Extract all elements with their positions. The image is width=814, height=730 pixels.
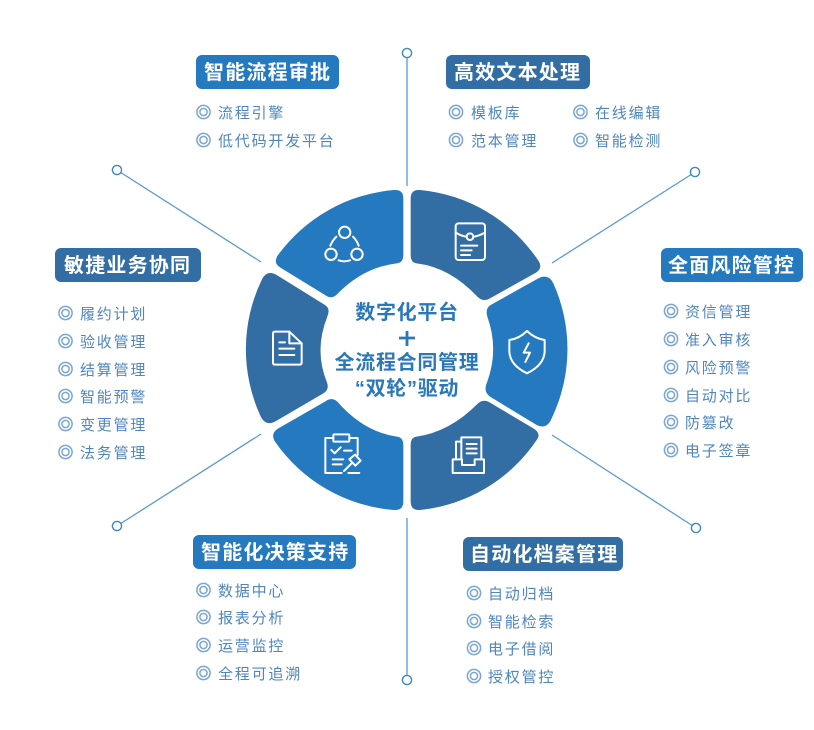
panel: 高效文本处理 [446, 55, 662, 150]
segment: top left with collaboration icon [276, 190, 403, 297]
panel: 全面风险管控: 全面风险管控 [668, 253, 795, 277]
segment: bottom right with archive tray icon [411, 401, 539, 510]
panel: 敏捷业务协同: 变更管理 [80, 417, 147, 434]
panel: 高效文本处理: 智能检测 [595, 132, 662, 150]
panel: 智能化决策支持: 运营监控 [218, 638, 285, 655]
panel: 智能流程审批 [196, 55, 339, 150]
panel: 敏捷业务协同: 法务管理 [80, 445, 147, 462]
panel: 自动化档案管理: 电子借阅 [488, 641, 555, 658]
panel: 全面风险管控: 自动对比 [685, 388, 752, 405]
connector: upper left [112, 165, 261, 262]
panel: 全面风险管控 [661, 248, 803, 460]
connector: lower right [552, 435, 701, 533]
panel: 全面风险管控: 风险预警 [685, 360, 752, 377]
panel: 智能化决策支持 [193, 535, 356, 683]
panel: 自动化档案管理: 自动化档案管理 [470, 543, 618, 566]
panel: 智能化决策支持: 全程可追溯 [218, 665, 302, 683]
center text: 数字化平台 [355, 300, 459, 324]
connector: bottom [402, 518, 412, 685]
panel: 全面风险管控: 防篡改 [685, 415, 735, 432]
panel: 智能化决策支持: 智能化决策支持 [201, 541, 349, 564]
panel: 敏捷业务协同: 智能预警 [80, 388, 147, 406]
panel: 智能流程审批: 智能流程审批 [204, 60, 331, 84]
connector: lower left [112, 434, 261, 531]
panel: 高效文本处理: 高效文本处理 [454, 60, 581, 84]
connector: top [402, 48, 412, 186]
panel: 智能流程审批: 流程引擎 [218, 105, 285, 122]
central ring [246, 190, 567, 510]
panel: 敏捷业务协同: 敏捷业务协同 [64, 253, 191, 277]
panel: 敏捷业务协同 [55, 248, 201, 462]
panel: 自动化档案管理 [463, 537, 623, 686]
connector: upper right [552, 167, 700, 263]
segment: top right with contract icon [411, 190, 540, 300]
panel: 全面风险管控: 电子签章 [685, 442, 752, 460]
segment: right with shield icon [486, 277, 567, 426]
panel: 敏捷业务协同: 验收管理 [80, 334, 147, 351]
panel: 高效文本处理: 在线编辑 [595, 105, 662, 122]
panel: 自动化档案管理: 智能检索 [488, 613, 555, 631]
segment: left with document icon [246, 273, 329, 423]
panel: 全面风险管控: 准入审核 [685, 332, 752, 349]
panel: 自动化档案管理: 授权管控 [488, 669, 555, 686]
center text: 全流程合同管理 [335, 350, 479, 374]
segment: bottom left with clipboard icon [273, 399, 403, 510]
panel: 智能流程审批: 低代码开发平台 [218, 133, 336, 150]
panel: 智能化决策支持: 报表分析 [218, 610, 285, 627]
plus sign [399, 331, 415, 346]
panel: 高效文本处理: 模板库 [471, 104, 521, 122]
panel: 自动化档案管理: 自动归档 [488, 586, 555, 603]
panel: 敏捷业务协同: 履约计划 [80, 306, 147, 323]
panel: 全面风险管控: 资信管理 [685, 304, 752, 321]
center text [335, 300, 479, 400]
panel: 敏捷业务协同: 结算管理 [80, 361, 147, 379]
panel: 智能化决策支持: 数据中心 [218, 583, 285, 600]
panel: 高效文本处理: 范本管理 [471, 133, 538, 150]
center text: “双轮”驱动 [355, 377, 459, 400]
